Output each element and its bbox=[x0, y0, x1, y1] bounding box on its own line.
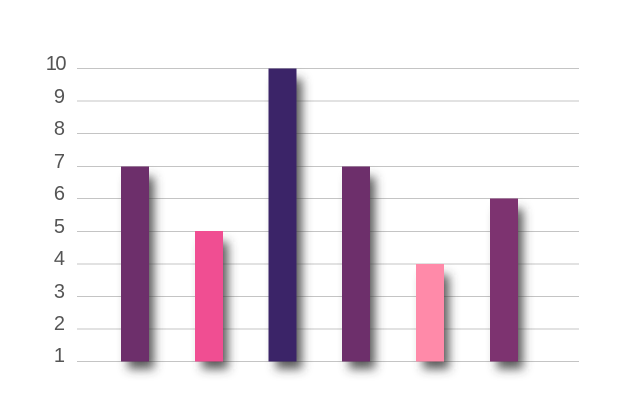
y-axis labels: 8 bbox=[54, 118, 65, 140]
bar: value 4 bbox=[416, 264, 444, 362]
bar: value 7 second bbox=[342, 166, 370, 362]
y-axis labels: 5 bbox=[54, 216, 65, 238]
y-axis labels: 6 bbox=[54, 183, 65, 205]
bar: value 7 bbox=[121, 166, 149, 362]
bar: value 10 bbox=[268, 68, 296, 362]
y-axis labels: 7 bbox=[54, 151, 65, 173]
y-axis labels bbox=[46, 53, 66, 367]
y-axis labels: 2 bbox=[54, 313, 65, 335]
y-axis labels: 9 bbox=[54, 86, 65, 108]
bar shadows bbox=[128, 79, 523, 369]
y-axis labels: 1 bbox=[54, 345, 65, 367]
y-axis labels: 10 bbox=[46, 53, 66, 75]
y-axis labels: 4 bbox=[54, 248, 65, 270]
bar: value 5 bbox=[195, 231, 223, 362]
y-axis labels: 3 bbox=[54, 281, 65, 303]
bar: value 6 bbox=[490, 198, 518, 362]
